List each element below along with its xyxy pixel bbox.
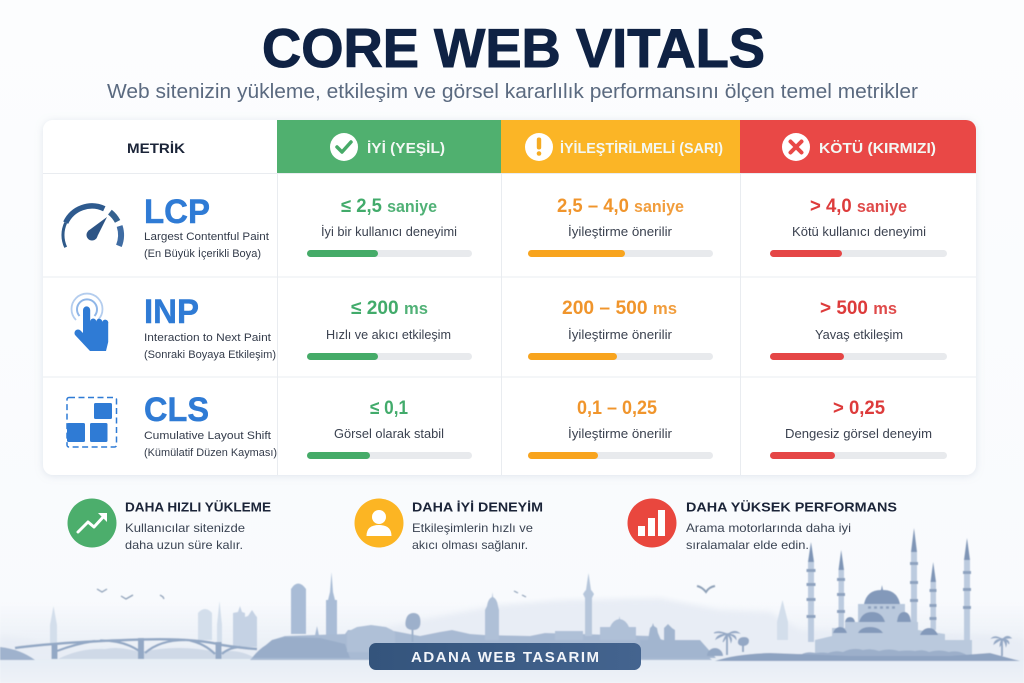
icon: layout shift squares	[67, 398, 116, 447]
header: good column: İYİ (YEŞİL)	[367, 140, 445, 157]
palm trees and shrubs	[707, 631, 1011, 656]
benefit: better experience	[354, 498, 543, 552]
haze	[0, 600, 1024, 660]
row: CLS metric: CLS	[144, 391, 209, 429]
mosque body	[815, 604, 972, 657]
row: CLS poor	[770, 398, 947, 459]
benefit: higher performance: DAHA YÜKSEK PERFORMANS	[686, 500, 897, 514]
benefit: faster loading: Kullanıcılar sitenizde	[125, 521, 245, 535]
row: INP poor	[770, 298, 947, 360]
row: INP metric: Interaction to Next Paint	[144, 332, 271, 344]
row: LCP poor	[770, 196, 947, 257]
row: INP poor: > 500 ms	[820, 298, 897, 319]
row: LCP poor: Kötü kullanıcı deneyimi	[792, 225, 926, 239]
row: CLS good: ≤ 0,1	[370, 398, 408, 419]
row: LCP metric: Largest Contentful Paint	[144, 231, 269, 243]
row: CLS good	[307, 398, 472, 459]
row: INP needs improvement: İyileştirme önerilir	[568, 328, 672, 342]
icon: bar chart	[628, 498, 676, 548]
right bank trees and houses	[640, 623, 716, 658]
illustration: city skyline	[0, 528, 1024, 683]
row: LCP poor: > 4,0 saniye	[810, 196, 907, 217]
row: LCP metric	[63, 193, 269, 260]
row: INP good: ≤ 200 ms	[351, 298, 428, 319]
header: good column	[277, 120, 501, 173]
row: INP metric: INP	[144, 293, 199, 331]
faded towers	[50, 600, 788, 647]
icon: tapping hand	[71, 294, 108, 351]
header: needs improvement column: İYİLEŞTİRİLMELİ (SARI)	[560, 140, 723, 157]
row: CLS metric: Cumulative Layout Shift	[144, 430, 271, 442]
row: CLS needs improvement	[528, 398, 713, 459]
benefit: better experience: akıcı olması sağlanır.	[412, 538, 528, 552]
row: LCP needs improvement	[528, 196, 713, 257]
island	[715, 653, 1020, 661]
icon: speedometer	[63, 206, 121, 247]
benefit: faster loading	[68, 498, 271, 552]
row: LCP needs improvement: 2,5 – 4,0 saniye	[557, 196, 684, 217]
row: INP needs improvement	[528, 298, 713, 360]
subtitle: Web sitenizin yükleme, etkileşim ve görsel kararlılık performansını ölçen temel metrikler	[107, 81, 918, 103]
benefit: higher performance: Arama motorlarında daha iyi	[686, 521, 851, 535]
icon: growth arrow	[68, 498, 116, 548]
header: poor column	[740, 120, 976, 173]
far hills	[0, 598, 1024, 660]
foreground shrubs	[790, 649, 975, 660]
central landmarks	[347, 573, 636, 652]
row: LCP good: ≤ 2,5 saniye	[341, 196, 437, 217]
title: CORE WEB VITALS	[262, 17, 765, 79]
benefit: higher performance	[628, 498, 897, 552]
footer badge: ADANA WEB TASARIM	[411, 649, 599, 666]
benefit: better experience: DAHA İYİ DENEYİM	[412, 500, 543, 514]
row: LCP good: İyi bir kullanıcı deneyimi	[321, 225, 457, 239]
panel: metrics table	[43, 120, 976, 475]
row: INP metric	[71, 293, 276, 361]
birds	[97, 586, 715, 599]
hills under bridge	[58, 648, 256, 659]
row: INP poor: Yavaş etkileşim	[815, 328, 903, 342]
row: LCP good	[307, 196, 472, 257]
header: poor column: KÖTÜ (KIRMIZI)	[819, 140, 936, 157]
water	[0, 659, 1024, 683]
header: metric column: METRİK	[127, 140, 185, 156]
row: INP needs improvement: 200 – 500 ms	[562, 298, 677, 319]
row: CLS needs improvement: İyileştirme önerilir	[568, 427, 672, 441]
left landmass dark edge	[252, 637, 350, 658]
row: CLS good: Görsel olarak stabil	[334, 427, 444, 441]
mosque	[715, 528, 1020, 661]
minarets	[808, 552, 970, 642]
header: needs improvement column	[501, 120, 740, 173]
left hill	[0, 647, 35, 660]
bridge	[15, 638, 257, 659]
row: CLS metric	[67, 391, 277, 459]
row: INP good	[307, 298, 472, 360]
benefit: faster loading: daha uzun süre kalır.	[125, 538, 243, 552]
footer badge	[369, 643, 641, 670]
row: CLS metric: (Kümülatif Düzen Kayması)	[144, 447, 277, 459]
row: CLS needs improvement: 0,1 – 0,25	[577, 398, 657, 419]
row: LCP metric: LCP	[144, 193, 210, 231]
benefit: higher performance: sıralamalar elde edin.	[686, 538, 809, 552]
icon: user	[354, 498, 404, 548]
window row	[868, 606, 896, 609]
central city silhouettes	[291, 572, 337, 640]
benefit: faster loading: DAHA HIZLI YÜKLEME	[125, 500, 271, 514]
benefit: better experience: Etkileşimlerin hızlı ve	[412, 521, 533, 535]
row: INP metric: (Sonraki Boyaya Etkileşim)	[144, 349, 276, 361]
row: INP good: Hızlı ve akıcı etkileşim	[326, 328, 451, 342]
row: LCP metric: (En Büyük İçerikli Boya)	[144, 247, 261, 260]
shoreline	[250, 630, 712, 660]
row: LCP needs improvement: İyileştirme önerilir	[568, 225, 672, 239]
row: CLS poor: Dengesiz görsel deneyim	[785, 427, 932, 441]
domes	[833, 585, 938, 635]
tree: city	[405, 613, 420, 642]
header: metric column	[43, 120, 277, 173]
row: CLS poor: > 0,25	[833, 398, 885, 419]
minaret caps and balconies	[806, 528, 971, 620]
